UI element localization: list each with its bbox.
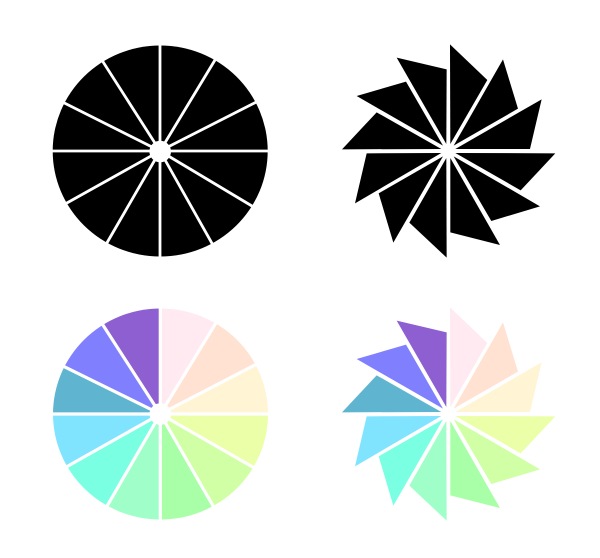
black segmented wheel [51,44,269,258]
infographic: four wheel graphics [52,44,556,520]
coloured segmented wheel [53,308,268,520]
coloured pinwheel [342,307,555,521]
black pinwheel [342,44,555,258]
